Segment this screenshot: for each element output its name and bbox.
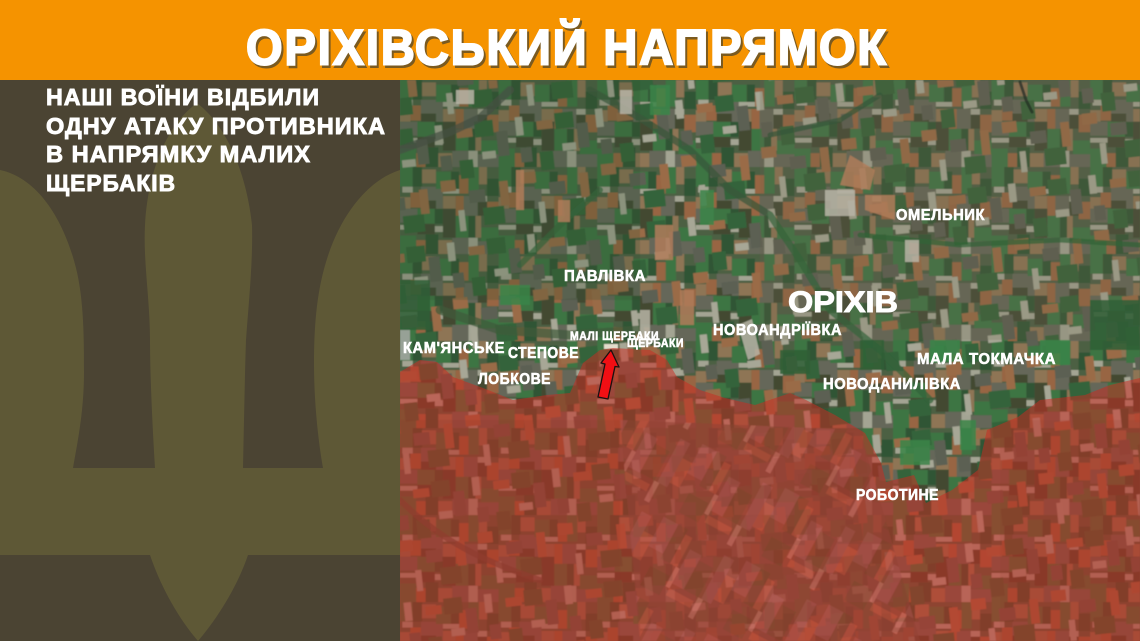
header bar: [0, 0, 1140, 80]
occupied territory overlay: [400, 348, 1140, 641]
map: rotated field block in the south: [620, 420, 920, 641]
description text: [46, 84, 386, 196]
title: ОРІХІВСЬКИЙ НАПРЯМОК: [248, 21, 890, 78]
label: Новоандріївка: НОВОАНДРІЇВКА: [713, 321, 842, 339]
map: distinctive bright fields: [400, 85, 1140, 465]
label: Мала Токмачка: МАЛА ТОКМАЧКА: [917, 351, 1056, 368]
description text: В НАПРЯМКУ МАЛИХ: [46, 141, 311, 167]
label: Омельник: ОМЕЛЬНИК: [896, 207, 985, 224]
label: Кам'янське: КАМ'ЯНСЬКЕ: [403, 340, 505, 357]
label: Роботине: РОБОТИНЕ: [856, 487, 939, 504]
map: regional tone washes: [400, 80, 640, 300]
title: ОРІХІВСЬКИЙ НАПРЯМОК: [246, 18, 888, 76]
label: Малі Щербаки: МАЛІ ЩЕРБАКИ: [570, 329, 659, 343]
label: Щербаки: ЩЕРБАКИ: [627, 336, 684, 350]
description text: ОДНУ АТАКУ ПРОТИВНИКА: [46, 113, 386, 139]
settlement labels: [403, 207, 1056, 504]
map: dark ravines and green corridors: [400, 82, 1140, 580]
label: Павлівка: ПАВЛІВКА: [564, 268, 646, 285]
label: Оріхів: ОРІХІВ: [788, 286, 898, 319]
attack arrow: [598, 350, 619, 399]
label: Лобкове: ЛОБКОВЕ: [478, 371, 551, 388]
satellite map: [400, 80, 1140, 641]
description text: НАШІ ВОЇНИ ВІДБИЛИ: [46, 84, 320, 110]
trident emblem: [0, 103, 400, 641]
label: Новоданилівка: НОВОДАНИЛІВКА: [823, 376, 961, 393]
description text: ЩЕРБАКІВ: [46, 170, 176, 196]
label: Степове: СТЕПОВЕ: [508, 345, 579, 362]
